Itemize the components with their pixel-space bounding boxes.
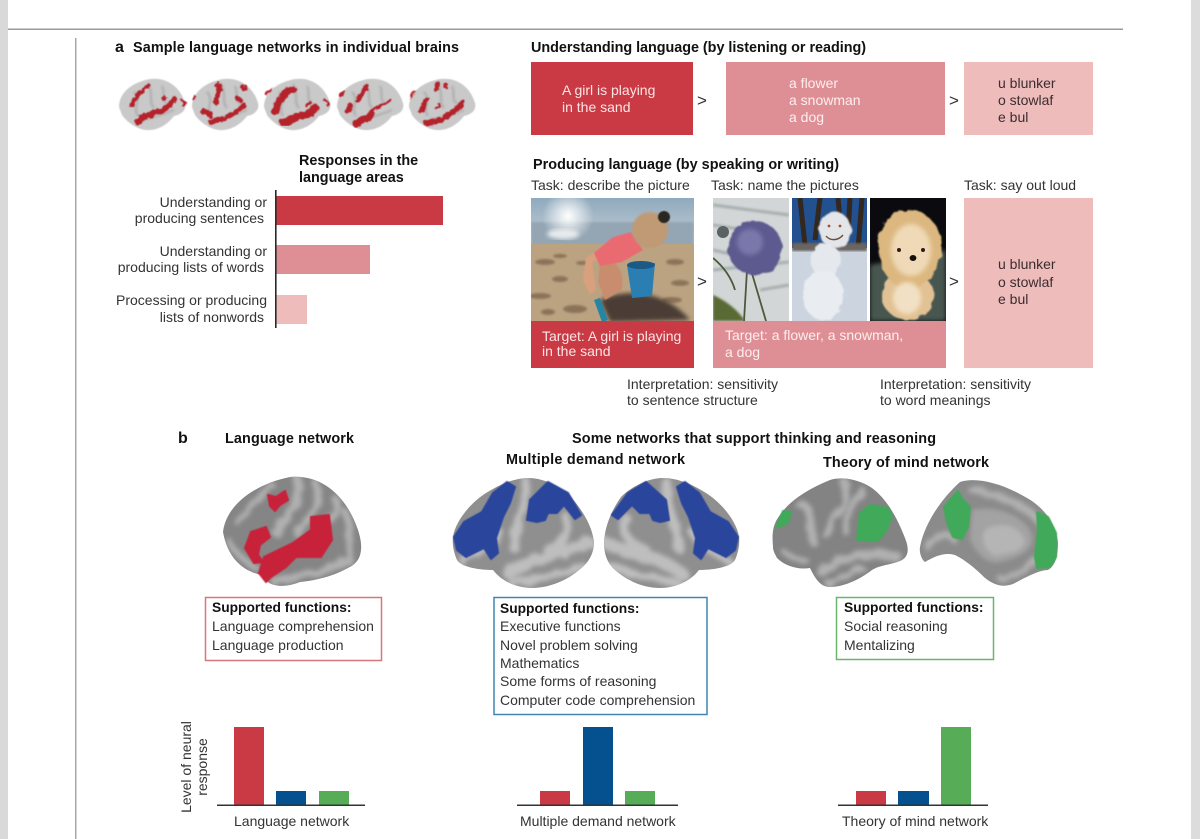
box: language network functions: Language production [212,637,344,653]
row: lists of nonwords [116,292,307,325]
task labels: Task: say out loud [964,177,1076,193]
nonword box: u blunker [998,256,1056,272]
box: multiple demand functions: Executive functions [500,618,621,634]
row: lists of nonwords: Processing or producing [116,292,267,308]
bar chart: theory of mind network [838,727,989,829]
small brain 1 [119,79,185,130]
word list box [726,62,945,135]
box: language network functions [206,598,382,660]
row: sentences [135,194,443,226]
task labels [531,177,1076,193]
task labels: Task: name the pictures [711,177,859,193]
box: theory of mind functions: Social reasoning [844,618,948,634]
small brain 3 [264,79,330,130]
row: lists of words: producing lists of words [118,259,264,275]
row: lists of words: Understanding or [160,243,267,259]
photo: girl playing in the sand [529,190,694,324]
red language areas [245,491,332,582]
word list box: a dog [789,109,824,125]
interpretation: sentence structure: Interpretation: sensitivity [627,376,778,392]
word list box: a snowman [789,92,861,108]
word list box: a flower [789,75,838,91]
target box: words: Target: a flower, a snowman, [725,327,903,343]
brain: theory of mind network, medial [920,480,1058,586]
row: lists of nonwords: lists of nonwords [160,309,264,325]
bar chart: responses in the language areas [116,153,443,328]
photo: dog [870,198,946,321]
box: theory of mind functions [836,598,994,660]
interpretation: sentence structure: to sentence structure [627,392,758,408]
box: theory of mind functions: Mentalizing [844,637,915,653]
nonword box: e bul [998,291,1028,307]
panel: understanding language [531,40,1093,135]
photo: snowman [792,198,867,321]
small brain 2 [192,79,258,130]
nonword box: u blunker [998,75,1056,91]
nonword box [964,198,1093,368]
panel a: sample language networks [115,39,475,328]
row: sentences: Understanding or [160,194,267,210]
heading: sample language networks: Sample language networks in individual brains [133,40,459,56]
axis [275,190,277,328]
box: multiple demand functions: Computer code comprehension [500,692,695,708]
interpretation: word meanings: to word meanings [880,392,991,408]
green regions [776,505,892,541]
bar chart: language network [217,727,365,829]
heading: theory of mind network: Theory of mind network [823,455,990,471]
y-axis label: Level of neural [178,721,194,813]
box: theory of mind functions: Supported functions: [844,600,984,615]
heading: producing language: Producing language (by speaking or writing) [533,157,839,173]
green regions [944,491,1056,568]
bar chart: multiple demand network: Multiple demand network [520,813,677,829]
arrow: greater than: > [949,272,959,291]
nonword box [964,62,1093,135]
arrow: greater than: > [949,91,959,110]
box: language network functions: Supported functions: [212,600,352,615]
photo: flower [713,198,789,321]
task labels: Task: describe the picture [531,177,690,193]
panel b: networks [178,430,1065,829]
brain: multiple demand network, right [604,478,740,588]
blue regions [454,482,581,559]
panel: producing language [529,157,1093,408]
small brain 4 [337,79,403,130]
heading: multiple demand network: Multiple demand network [506,452,686,468]
box: language network functions: Language comprehension [212,618,374,634]
arrow: greater than: > [697,272,707,291]
sentence box: in the sand [562,99,630,115]
sentence box: A girl is playing [562,82,655,98]
nonword box: e bul [998,109,1028,125]
brain: theory of mind network, lateral [772,478,908,587]
row: lists of words [118,243,370,275]
box: multiple demand functions: Novel problem solving [500,637,638,653]
y-axis label: response [194,738,210,796]
box: multiple demand functions [494,598,707,714]
brain: multiple demand network, left [452,478,594,588]
target box: sentence: Target: A girl is playing [542,328,681,344]
target box: words [713,321,946,368]
heading: thinking and reasoning: Some networks that support thinking and reasoning [572,431,936,447]
panel letter a: a [115,39,124,56]
chart title: Responses in the [299,153,418,169]
sentence box [531,62,693,135]
box: multiple demand functions: Supported functions: [500,601,640,616]
target box: sentence [531,321,694,368]
blue regions [612,482,738,559]
chart title: language areas [299,170,404,186]
target box: words: a dog [725,344,760,360]
heading: understanding language: Understanding language (by listening or reading) [531,40,866,56]
panel letter b: b [178,430,188,447]
target box: sentence: in the sand [542,343,610,359]
bar chart: multiple demand network [517,727,678,829]
brain: language network [223,476,362,586]
arrow: greater than: > [697,91,707,110]
nonword box: o stowlaf [998,274,1053,290]
bar chart: language network: Language network [234,813,350,829]
heading: language network: Language network [225,431,355,447]
small brain 5 [409,79,475,130]
box: multiple demand functions: Some forms of reasoning [500,673,656,689]
box: multiple demand functions: Mathematics [500,655,579,671]
interpretation: word meanings: Interpretation: sensitivity [880,376,1031,392]
bar chart: theory of mind network: Theory of mind network [842,813,989,829]
row: sentences: producing sentences [135,210,264,226]
nonword box: o stowlaf [998,92,1053,108]
